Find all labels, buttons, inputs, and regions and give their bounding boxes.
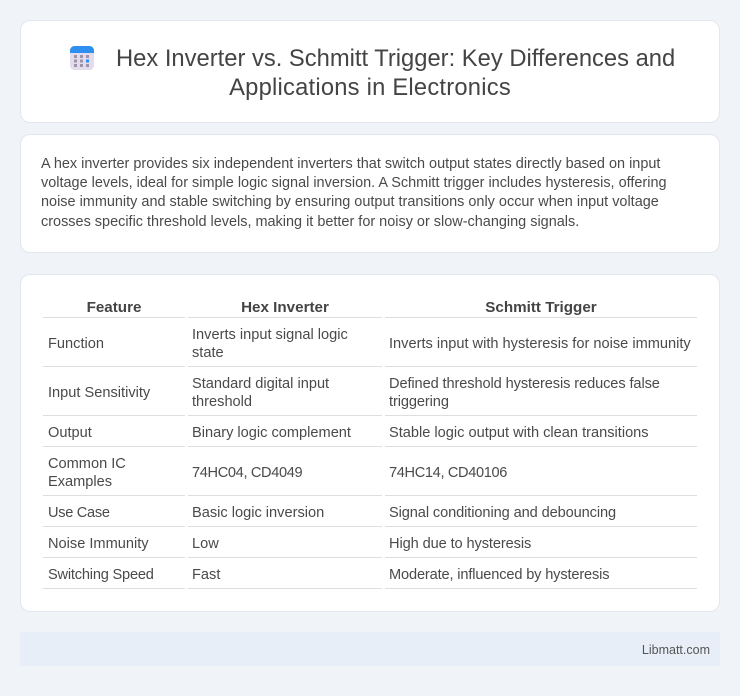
table header: Hex Inverter: Hex Inverter [241,299,329,316]
cell: Moderate, influenced by hysteresis [389,567,609,583]
cell [389,376,660,410]
cell: Inverts input signal logic [192,327,348,343]
intro text [41,156,667,230]
panel: header card [20,20,720,123]
row: Use Case: Use Case [48,505,110,521]
cell: Signal conditioning and debouncing [389,505,616,521]
cell [192,327,348,361]
cell: Defined threshold hysteresis reduces false [389,376,660,392]
row: Common IC Examples: Common IC [48,456,126,472]
title [116,45,675,101]
cell: High due to hysteresis [389,536,531,552]
cell: Binary logic complement [192,425,351,441]
cell: Inverts input with hysteresis for noise immunity [389,336,691,352]
row: Output: Output [48,425,92,441]
row: Noise Immunity: Noise Immunity [48,536,149,552]
row: Common IC Examples [48,456,126,490]
table header: Schmitt Trigger: Schmitt Trigger [485,299,597,316]
cell: Low [192,536,219,552]
panel: table card [20,274,720,612]
cell: triggering [389,394,449,410]
footer text: Libmatt.com [642,643,710,657]
intro text: crosses specific threshold levels, making it better for noisy or slow-changing signals. [41,214,579,230]
cell: state [192,345,224,361]
panel: intro card [20,134,720,253]
cell: Basic logic inversion [192,505,324,521]
cell: 74HC04, CD4049 [192,465,302,481]
title: Hex Inverter vs. Schmitt Trigger: Key Differences and [116,45,675,72]
footer bar [20,632,720,666]
title: Applications in Electronics [229,74,511,101]
row: Common IC Examples: Examples [48,474,112,490]
intro text: A hex inverter provides six independent inverters that switch output states directly based on input [41,156,660,172]
cell: threshold [192,394,252,410]
intro text: voltage levels, ideal for simple logic signal inversion. A Schmitt trigger includes hysteresis, offering [41,175,667,191]
row: Function: Function [48,336,104,352]
cell [192,376,329,410]
cell: Fast [192,567,220,583]
cell: Standard digital input [192,376,329,392]
row: Switching Speed: Switching Speed [48,567,154,583]
row: Input Sensitivity: Input Sensitivity [48,385,150,401]
table: comparison [43,299,697,589]
table header: Feature: Feature [87,299,141,316]
intro text: noise immunity and stable switching by ensuring output transitions only occur when input voltage [41,194,659,210]
cell: Stable logic output with clean transitions [389,425,649,441]
icon: calendar [70,46,94,70]
cell: 74HC14, CD40106 [389,465,507,481]
